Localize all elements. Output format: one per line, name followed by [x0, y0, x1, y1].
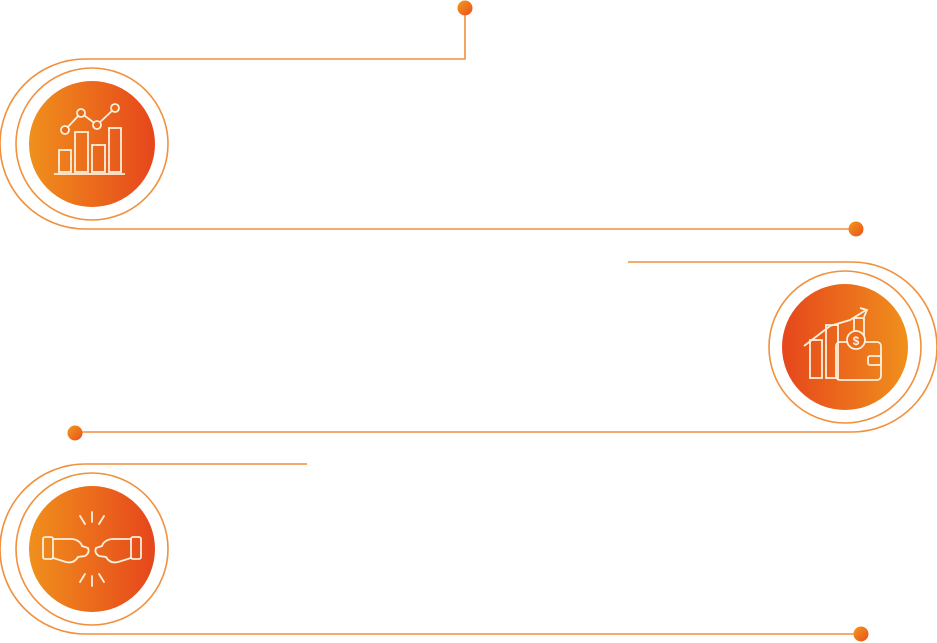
- icon: wallet growth: $: [853, 334, 860, 348]
- dot end 1: [848, 222, 864, 236]
- connector line 2: [75, 262, 937, 432]
- panel: section 2: [68, 262, 937, 440]
- icon: wallet growth: [782, 284, 908, 410]
- panel: section 1: [0, 0, 864, 236]
- dot start 1: [458, 0, 472, 16]
- icon: bar chart: [29, 81, 155, 207]
- dot end 3: [854, 626, 868, 642]
- icon: fist bump: [29, 486, 155, 612]
- connector line 1: [0, 8, 856, 229]
- ring 3: [16, 473, 168, 625]
- panel: section 3: [0, 464, 868, 642]
- ring 2: [769, 271, 921, 423]
- connector line 3: [0, 464, 861, 634]
- dot end 2: [68, 426, 82, 440]
- ring 1: [16, 68, 168, 220]
